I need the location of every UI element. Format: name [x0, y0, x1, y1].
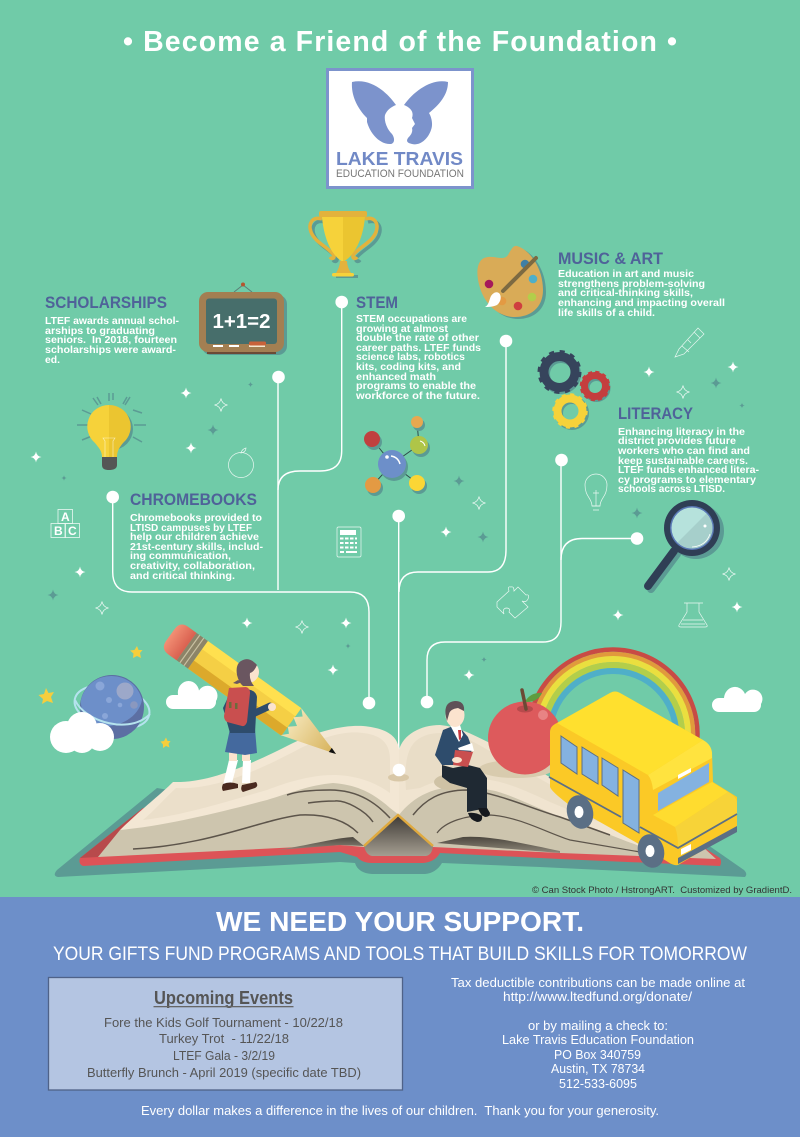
icon: ABC blocks: A — [61, 510, 70, 524]
panel: music and art text: enhancing and impacting overall — [558, 298, 725, 309]
donation details: PO Box 340759 — [554, 1048, 641, 1062]
panel: upcoming events: Fore the Kids Golf Tournament - 10/22/18 — [104, 1015, 343, 1030]
icon: pencil outline — [675, 328, 704, 357]
title: • Become a Friend of the Foundation • — [123, 26, 677, 58]
panel: STEM text: science labs, robotics — [356, 352, 465, 363]
panel: literacy text: workers who can find and — [617, 446, 750, 457]
icon: ABC blocks: C — [68, 524, 77, 538]
donation details: or by mailing a check to: — [528, 1019, 668, 1033]
illustration: clouds and stars — [38, 646, 762, 753]
left top page — [120, 726, 399, 830]
panel: literacy text — [617, 404, 759, 495]
panel: STEM text: growing at almost — [356, 324, 449, 335]
icon: apple outline — [228, 448, 254, 478]
illustration: girl with backpack — [222, 659, 276, 792]
panel: scholarships text: SCHOLARSHIPS — [45, 293, 167, 312]
icon: magnifying glass — [648, 500, 724, 589]
panel: chromebooks text: ing communication, — [130, 551, 231, 562]
panel: scholarships text: arships to graduating — [45, 326, 155, 337]
illustration: boy reading — [434, 701, 490, 822]
heading: we need your support: WE NEED YOUR SUPPORT. — [216, 906, 584, 937]
bus wheels — [563, 792, 597, 832]
logo: Lake Travis Education Foundation — [328, 70, 472, 188]
panel: literacy text: schools across LTISD. — [618, 484, 725, 495]
panel: upcoming events: Turkey Trot - 11/22/18 — [159, 1031, 289, 1046]
right page block — [399, 770, 716, 859]
donation details: 512-533-6095 — [559, 1077, 637, 1091]
panel: literacy text: Enhancing literacy in the — [618, 427, 745, 438]
donation details — [451, 976, 746, 1091]
illustration: open book — [55, 725, 746, 877]
panel: chromebooks text: LTISD campuses by LTEF — [130, 523, 252, 534]
icon: chalkboard: 1+1=2 — [212, 311, 270, 333]
icon: puzzle piece outline — [497, 587, 529, 618]
logo: Lake Travis Education Foundation: EDUCATION FOUNDATION — [336, 168, 464, 180]
right top page — [399, 725, 680, 850]
panel: upcoming events: Upcoming Events — [154, 988, 293, 1008]
center dot and shadow — [388, 774, 409, 782]
book gutter — [364, 815, 433, 856]
panel: literacy text: LTEF funds enhanced litera- — [618, 465, 759, 476]
illustration: school bus — [549, 692, 737, 871]
icon: molecule — [364, 416, 430, 496]
panel: music and art text — [558, 249, 725, 319]
panel: STEM text: STEM — [356, 293, 398, 312]
panel: chromebooks text: creativity, collaboration, — [130, 561, 255, 572]
panel: scholarships text: seniors. In 2018, fourteen — [45, 335, 177, 346]
left page block — [98, 775, 399, 857]
panel: literacy text: district provides future — [618, 436, 736, 447]
panel: STEM text: double the rate of other — [356, 333, 479, 344]
panel: chromebooks text: help our children achieve — [130, 532, 259, 543]
donation details: http://www.ltedfund.org/donate/ — [503, 990, 693, 1004]
illustration: planet — [70, 675, 154, 739]
bus hood — [653, 782, 728, 827]
panel: music and art text: MUSIC & ART — [558, 249, 664, 268]
red cover — [79, 808, 721, 866]
bus trim — [549, 777, 737, 848]
icon: ABC blocks: B — [54, 524, 63, 538]
panel: scholarships text: LTEF awards annual schol- — [45, 316, 179, 327]
panel: upcoming events: LTEF Gala - 3/2/19 — [173, 1048, 275, 1063]
panel: scholarships text: scholarships were award- — [45, 345, 176, 356]
bus roof — [557, 692, 703, 775]
panel: chromebooks text: and critical thinking. — [130, 571, 235, 582]
icon: trophy — [310, 211, 380, 278]
icon: light bulb outline — [585, 474, 607, 510]
donation details: Lake Travis Education Foundation — [502, 1033, 694, 1047]
icon: flask outline — [679, 603, 707, 627]
icon: gears — [540, 352, 608, 427]
panel: upcoming events: Butterfly Brunch - April 2019 (specific date TBD) — [87, 1065, 361, 1080]
panel: chromebooks text: CHROMEBOOKS — [130, 490, 257, 509]
page crease lines — [133, 790, 640, 852]
panel: STEM text: STEM occupations are — [356, 314, 467, 325]
panel: literacy text: cy programs to elementary — [618, 475, 756, 486]
icon: artist palette — [477, 246, 546, 319]
illustration: rainbow — [510, 650, 710, 818]
icon: light bulb — [77, 393, 146, 470]
panel: STEM text: enhanced math — [356, 372, 436, 383]
donation details: Austin, TX 78734 — [551, 1062, 645, 1076]
panel: chromebooks text — [130, 490, 263, 582]
panel: literacy text: keep sustainable careers. — [618, 456, 748, 467]
panel: chromebooks text: Chromebooks provided to — [130, 513, 262, 524]
panel: STEM text: programs to enable the — [356, 381, 476, 392]
bus windows — [561, 736, 577, 774]
icon: ABC blocks — [51, 510, 80, 538]
dark inner page shadows — [277, 837, 364, 850]
icon: chalkboard — [199, 282, 287, 355]
panel: music and art text: Education in art and music — [558, 269, 694, 280]
logo: Lake Travis Education Foundation: LAKE TRAVIS — [336, 148, 463, 169]
panel: upcoming events — [48, 978, 402, 1090]
illustration: apple — [479, 690, 562, 778]
panel: music and art text: and critical-thinking skills, — [558, 288, 693, 299]
panel: chromebooks text: 21st-century skills, includ- — [130, 542, 263, 553]
subheading: YOUR GIFTS FUND PROGRAMS AND TOOLS THAT BUILD SKILLS FOR TOMORROW — [53, 944, 747, 965]
panel: STEM text: career paths. LTEF funds — [356, 343, 481, 354]
panel: scholarships text: ed. — [45, 355, 60, 366]
panel: music and art text: life skills of a child. — [558, 308, 655, 319]
panel: support footer — [0, 897, 800, 1137]
donation details: Tax deductible contributions can be made online at — [451, 976, 746, 990]
panel: scholarships text — [45, 293, 179, 366]
thank you line: Every dollar makes a difference in the lives of our children. Thank you for your generosity. — [141, 1104, 659, 1118]
panel: STEM text — [355, 293, 481, 402]
illustration: giant pencil — [160, 621, 346, 768]
background — [0, 0, 800, 897]
bus body — [550, 692, 737, 865]
panel: STEM text: workforce of the future. — [355, 391, 480, 402]
panel: literacy text: LITERACY — [618, 404, 694, 423]
connector lines and dots — [106, 296, 643, 770]
icon: calculator outline — [337, 527, 361, 557]
sparkles — [30, 362, 745, 680]
panel: STEM text: kits, coding kits, and — [356, 362, 461, 373]
panel: music and art text: strengthens problem-solving — [558, 279, 705, 290]
book shadow — [55, 788, 746, 877]
image credit: © Can Stock Photo / HstrongART. Customized by GradientD. — [532, 885, 792, 896]
